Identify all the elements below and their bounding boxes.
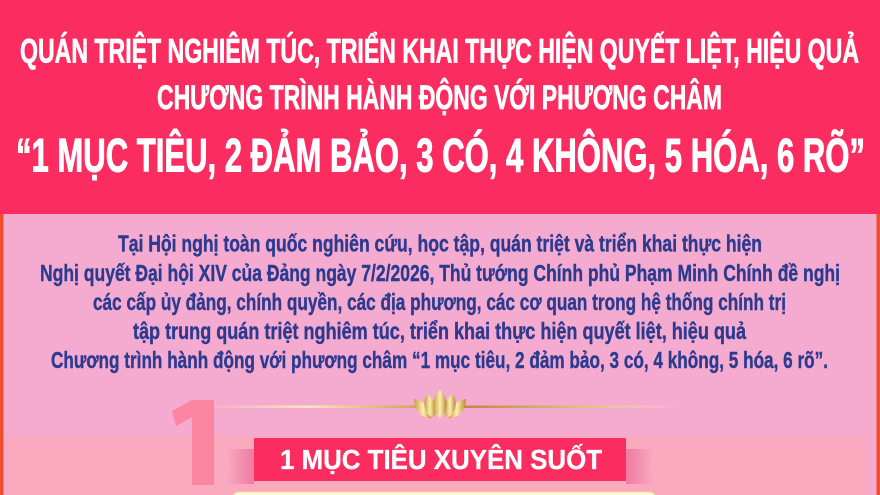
panel: red header — [0, 0, 880, 214]
gold divider left — [214, 406, 420, 408]
section banner — [254, 438, 626, 481]
ribbon tail right — [626, 449, 658, 484]
left orange edge — [0, 214, 4, 495]
right orange edge — [876, 214, 880, 495]
panel: lavender-pink body background — [0, 214, 880, 495]
ribbon tail left — [222, 449, 254, 484]
cream content box — [233, 492, 655, 495]
gold divider right — [462, 406, 680, 408]
intro text block — [40, 230, 840, 373]
icon: gold lotus — [414, 390, 466, 418]
lower pink band — [5, 436, 868, 495]
section banner: 1 MỤC TIÊU XUYÊN SUỐT — [280, 443, 602, 475]
title — [16, 32, 865, 182]
